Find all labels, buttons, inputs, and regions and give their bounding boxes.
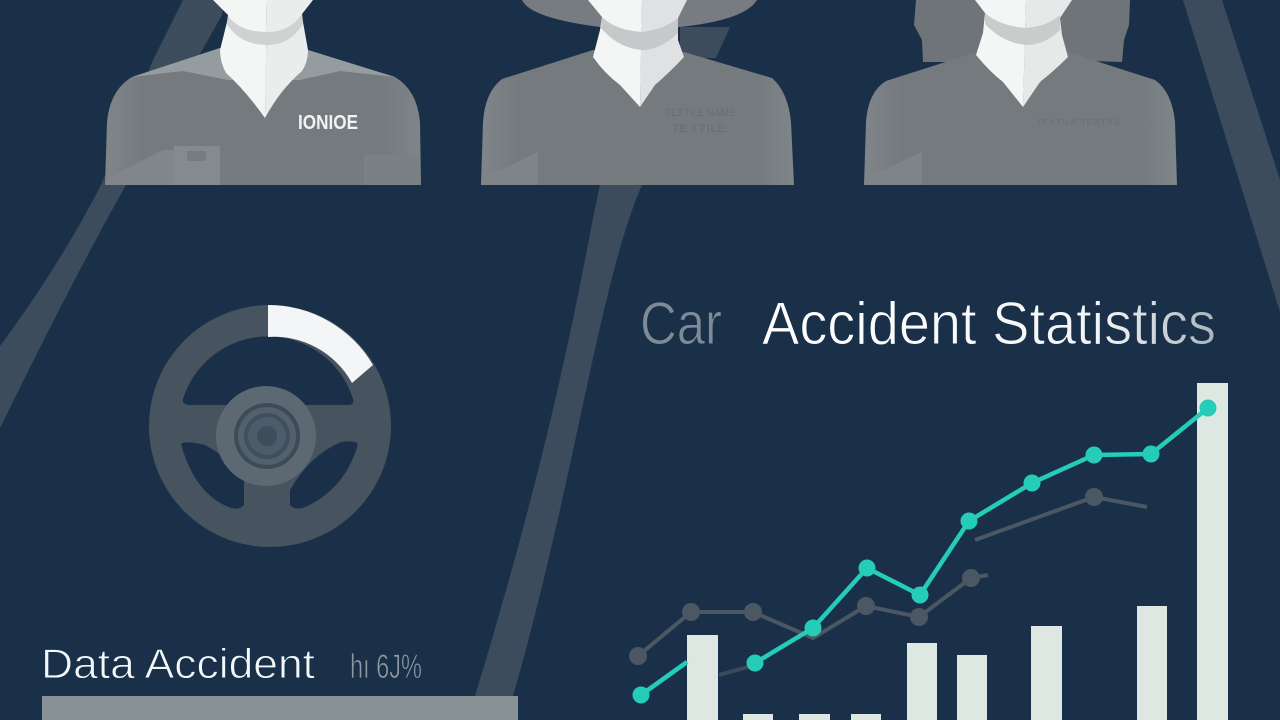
highlighted rim arc — [268, 305, 373, 383]
wheel rim — [149, 305, 391, 547]
lower right panel — [364, 155, 420, 185]
lower panels — [482, 152, 538, 185]
hair — [914, 0, 1130, 62]
data accident panel — [42, 696, 518, 720]
figure: right person — [864, 0, 1177, 185]
shirt — [864, 52, 1177, 185]
upper opening — [183, 336, 353, 405]
figure: left person — [105, 0, 421, 185]
title: Car — [640, 290, 722, 357]
figure: centre person — [481, 0, 794, 185]
bar chart — [687, 383, 1228, 720]
chin shadow — [601, 17, 678, 50]
hub rings — [234, 403, 300, 469]
collar — [132, 48, 395, 80]
lower left opening — [181, 442, 244, 509]
neck and face — [588, 0, 642, 107]
shirt text: TEXTILE NAME — [665, 107, 735, 119]
shirt — [105, 48, 421, 185]
pocket — [174, 146, 220, 185]
hub — [216, 386, 316, 486]
shirt — [481, 50, 794, 185]
lower left panel — [106, 150, 174, 185]
neck and face — [975, 0, 1026, 107]
shirt logo: IONIOE — [298, 112, 358, 134]
icon: steering wheel — [149, 305, 391, 547]
chin shadow — [227, 14, 303, 45]
lower right opening — [290, 441, 358, 509]
line chart: grey comparison series — [629, 488, 1147, 675]
shirt text — [665, 107, 735, 135]
data accident heading: Data Accident — [41, 640, 315, 687]
shirt text: TEXTILE — [671, 123, 727, 135]
shirt text: TEXTILE TEXTILE — [1036, 118, 1122, 127]
chin shadow — [985, 13, 1060, 45]
neck and face — [213, 0, 267, 118]
hair — [522, 0, 757, 27]
line chart: teal series — [632, 400, 1216, 704]
title: Accident Statistics — [762, 290, 1216, 357]
lower panels — [865, 152, 922, 185]
heading glyph note: hı 6J% — [350, 648, 422, 686]
